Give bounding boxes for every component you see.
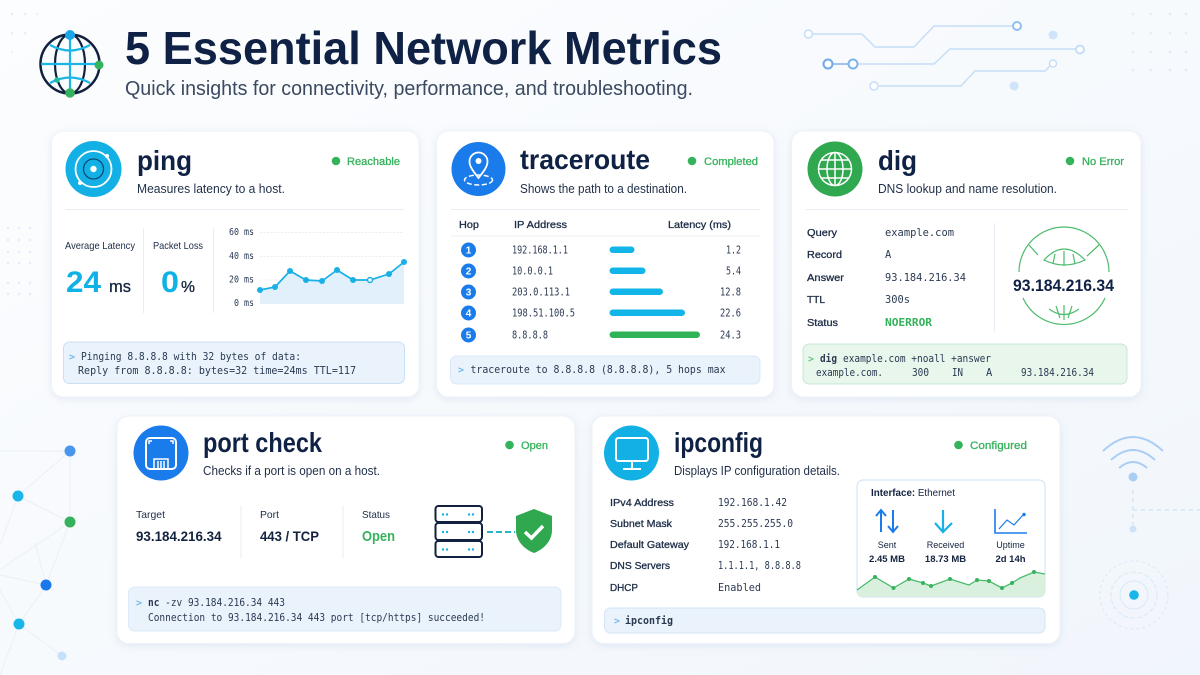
heading: dig: dig — [878, 145, 917, 176]
row 5 — [461, 328, 741, 342]
icon: received arrow — [935, 510, 952, 532]
icon: dns globe — [808, 142, 862, 196]
field: status: Open — [362, 528, 395, 545]
decoration: left network mesh — [0, 446, 76, 675]
stat: received: 18.73 MB — [925, 554, 966, 565]
icon: network globe — [40, 30, 104, 98]
terminal: traceroute output: traceroute to 8.8.8.8 (8.8.8.8), 5 hops max — [470, 364, 726, 376]
dns record details: Record — [807, 249, 842, 261]
status: reachable: Reachable — [347, 156, 400, 168]
connector: dashed link — [487, 531, 515, 533]
ip configuration details: Subnet Mask — [610, 518, 673, 530]
ip configuration details: DNS Servers — [610, 560, 670, 572]
stat: sent — [869, 540, 905, 565]
globe with resolved ip: 93.184.216.34 — [1013, 277, 1115, 295]
table header — [459, 219, 731, 231]
status: completed: Completed — [704, 156, 758, 168]
terminal: ping output: Reply from 8.8.8.8: bytes=32 time=24ms TTL=117 — [78, 365, 356, 377]
terminal: dig output: 93.184.216.34 — [1021, 367, 1094, 379]
icon: security shield — [516, 509, 552, 553]
row 2 — [461, 264, 741, 278]
panel: dig — [792, 131, 1141, 397]
decoration: circuit traces — [804, 22, 1084, 90]
terminal: ipconfig command: > — [614, 616, 620, 627]
icon: monitor — [604, 426, 659, 480]
terminal: port check output: Connection to 93.184.216.34 443 port [tcp/https] succeeded! — [148, 612, 485, 624]
panel: port check — [117, 416, 575, 644]
terminal: dig output: example.com. — [816, 367, 883, 379]
dns record details: 300s — [885, 294, 910, 306]
row 4: 22.6 — [720, 308, 741, 320]
terminal: ping output: > — [69, 352, 75, 363]
ip configuration details: 1.1.1.1, 8.8.8.8 — [718, 560, 801, 572]
icon: ethernet port — [134, 426, 188, 480]
description: Shows the path to a destination. — [520, 182, 687, 196]
description: Displays IP configuration details. — [674, 464, 840, 478]
row 1: 192.168.1.1 — [512, 244, 568, 256]
terminal: ping output: Pinging 8.8.8.8 with 32 bytes of data: — [81, 351, 301, 363]
field: status: Status — [362, 509, 390, 521]
status: open — [505, 440, 548, 452]
row 1 — [461, 242, 741, 258]
dns record details: Status — [807, 317, 838, 329]
decoration: wifi signal — [1103, 437, 1200, 532]
terminal: dig output — [803, 344, 1127, 384]
ip configuration details: IPv4 Address — [610, 497, 674, 509]
ip configuration details: DHCP — [610, 582, 638, 594]
dns record details: A — [885, 249, 892, 261]
panel: interface stats — [857, 480, 1045, 597]
metric: average latency: 24 — [66, 266, 101, 299]
icon: server stack — [436, 506, 482, 557]
globe with resolved ip — [1013, 227, 1115, 324]
line chart: latency: 40 ms — [229, 251, 254, 262]
description: Measures latency to a host. — [137, 182, 285, 196]
stat: uptime: Uptime — [996, 540, 1025, 550]
ip configuration details — [610, 497, 801, 594]
subtitle: Quick insights for connectivity, performance, and troubleshooting. — [125, 78, 693, 100]
terminal: port check output: nc -zv 93.184.216.34 443 — [148, 597, 285, 609]
ip configuration details: Default Gateway — [610, 539, 690, 551]
row 2: 10.0.0.1 — [512, 266, 553, 278]
terminal: traceroute output: > — [458, 365, 464, 376]
heading: ping: ping — [137, 145, 192, 176]
icon: location pin — [452, 142, 506, 196]
panel: traceroute — [436, 131, 774, 397]
row 4 — [461, 306, 741, 320]
table header: Hop — [459, 219, 479, 231]
terminal: dig output: dig — [820, 353, 837, 365]
metric: average latency: Average Latency — [65, 240, 136, 252]
row 5: 5 — [466, 330, 472, 342]
ip configuration details: Enabled — [718, 582, 761, 594]
table header: IP Address — [514, 219, 567, 231]
panel: ipconfig — [592, 416, 1060, 644]
line chart: latency — [229, 227, 407, 309]
line chart: latency: 20 ms — [229, 274, 254, 286]
metric: packet loss — [153, 240, 203, 299]
row 2: 5.4 — [726, 266, 741, 278]
dns record details: example.com — [885, 227, 954, 239]
icon: ping target — [66, 141, 122, 197]
description: DNS lookup and name resolution. — [878, 182, 1057, 196]
terminal: ipconfig command — [604, 608, 1045, 633]
row 4: 4 — [466, 308, 472, 320]
icon: uptime chart — [995, 509, 1027, 533]
metric: average latency: ms — [109, 277, 131, 296]
terminal: port check output — [128, 587, 561, 631]
metric: packet loss: Packet Loss — [153, 240, 203, 252]
stat: received: Received — [927, 540, 964, 550]
line chart: latency: 60 ms — [229, 227, 254, 238]
stat: uptime: 2d 14h — [995, 554, 1026, 565]
dns record details: Answer — [807, 272, 845, 284]
row 5: 8.8.8.8 — [512, 330, 548, 342]
terminal: ipconfig command: ipconfig — [625, 615, 673, 627]
terminal: dig output: > — [808, 354, 814, 365]
terminal: dig output: A — [986, 367, 993, 379]
row 3: 203.0.113.1 — [512, 286, 570, 298]
row 3: 12.8 — [720, 286, 741, 298]
dns record details: Query — [807, 227, 838, 239]
status: configured: Configured — [970, 440, 1027, 452]
row 3 — [461, 284, 741, 300]
dns record details: 93.184.216.34 — [885, 272, 966, 284]
terminal: port check output: > — [136, 598, 142, 609]
dns record details: NOERROR — [885, 317, 933, 329]
field: port: 443 / TCP — [260, 528, 319, 544]
metric: average latency — [65, 240, 136, 299]
metric: packet loss: % — [181, 279, 195, 296]
decoration: radial beacon — [1100, 561, 1168, 629]
ip configuration details: 192.168.1.1 — [718, 539, 780, 551]
terminal: traceroute output — [450, 356, 760, 384]
terminal: dig output: 300 — [912, 367, 929, 379]
row 1: 1 — [466, 246, 472, 256]
dns record details — [807, 227, 966, 329]
terminal: dig output: IN — [952, 367, 963, 379]
heading: port check: port check — [203, 427, 323, 458]
line chart: latency: 0 ms — [234, 298, 254, 309]
row 2: 2 — [466, 266, 472, 278]
stat: sent: 2.45 MB — [869, 554, 905, 565]
field: port: Port — [260, 509, 279, 521]
ip configuration details: 255.255.255.0 — [718, 518, 793, 530]
stat: received — [925, 540, 966, 565]
heading: ipconfig: ipconfig — [674, 427, 763, 458]
field: status — [362, 509, 395, 545]
metric: packet loss: 0 — [161, 266, 179, 299]
heading: traceroute: traceroute — [520, 144, 650, 175]
field: port — [260, 509, 319, 544]
panel: ping — [52, 131, 419, 397]
title: 5 Essential Network Metrics — [125, 22, 722, 74]
ip configuration details: 192.168.1.42 — [718, 497, 787, 509]
table header: Latency (ms) — [668, 219, 731, 231]
row 4: 198.51.100.5 — [512, 308, 575, 320]
stat: sent: Sent — [878, 540, 897, 550]
terminal: dig output: example.com +noall +answer — [843, 353, 991, 365]
status: no error: No Error — [1082, 156, 1124, 168]
table: hops — [451, 219, 760, 342]
dns record details: TTL — [807, 294, 825, 306]
row 1: 1.2 — [726, 244, 741, 256]
panel: interface stats: Interface: Ethernet — [871, 488, 955, 499]
terminal: ping output — [64, 342, 404, 384]
row 5: 24.3 — [720, 330, 741, 342]
area chart: traffic — [857, 570, 1045, 597]
field: target: Target — [136, 509, 165, 521]
row 3: 3 — [466, 288, 472, 298]
stat: uptime — [995, 540, 1026, 565]
status: open: Open — [521, 440, 548, 452]
field: target: 93.184.216.34 — [136, 528, 222, 544]
icon: sent arrows — [876, 510, 898, 532]
description: Checks if a port is open on a host. — [203, 464, 380, 478]
field: target — [136, 509, 222, 544]
